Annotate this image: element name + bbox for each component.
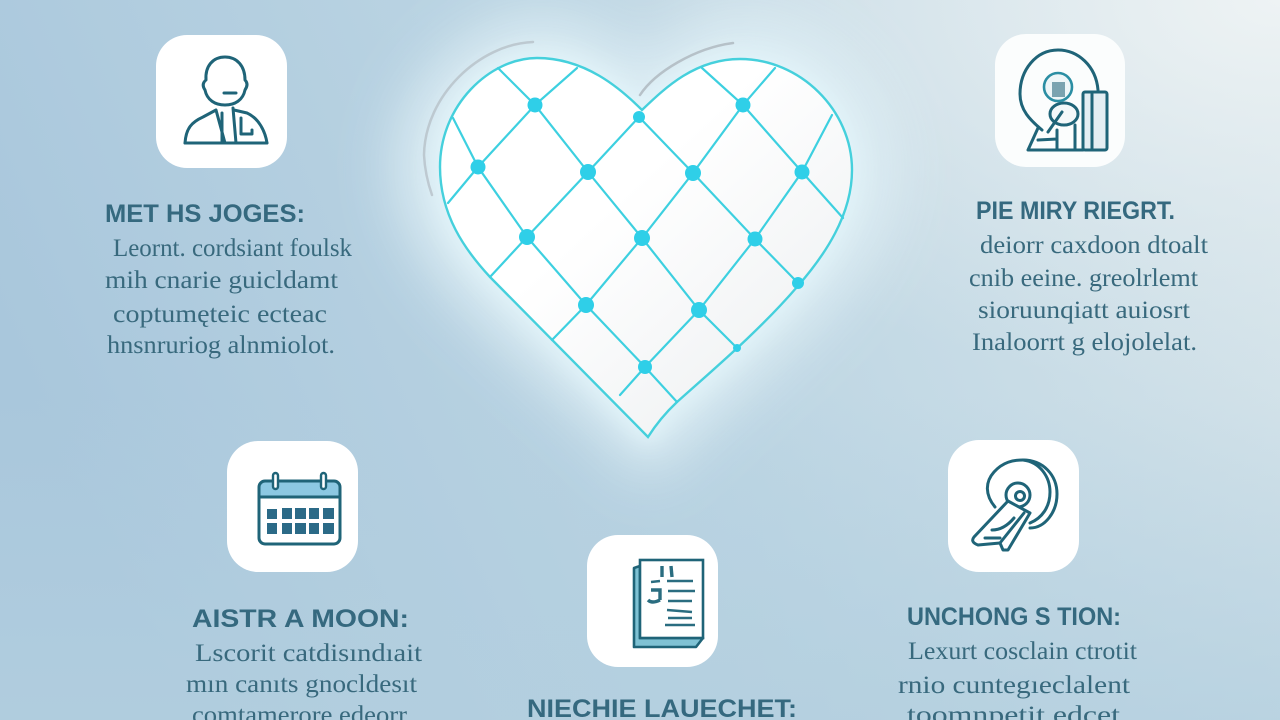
body text: mih cnarie guicldamt bbox=[105, 267, 338, 294]
body text: Leornt. cordsiant foulsk bbox=[113, 235, 352, 262]
heading: MET HS JOGES: bbox=[105, 200, 305, 228]
body text: deiorr caxdoon dtoalt bbox=[980, 232, 1208, 259]
panel: top right item bbox=[969, 34, 1208, 356]
heart with mesh bbox=[424, 42, 852, 437]
panel: top left item bbox=[105, 35, 352, 359]
icon card: doctor bbox=[156, 35, 287, 168]
body text bbox=[105, 235, 352, 359]
body text: sioruunqiatt auiosrt bbox=[978, 297, 1190, 324]
body text bbox=[898, 638, 1137, 720]
body text: Lexurt cosclain ctrotit bbox=[908, 638, 1137, 665]
icon card: calendar bbox=[227, 441, 358, 572]
mesh nodes bbox=[470, 98, 810, 374]
grey arcs behind heart bbox=[424, 42, 733, 195]
body text bbox=[186, 640, 422, 720]
body text: cnib eeine. greolrlemt bbox=[969, 265, 1198, 292]
icon card: scanner with patient bbox=[995, 34, 1125, 167]
heading: PIE MIRY RIEGRT. bbox=[976, 197, 1175, 225]
heart glow bbox=[395, 15, 895, 480]
panel: bottom left item bbox=[186, 441, 422, 720]
panel: bottom center item bbox=[527, 535, 797, 720]
body text: Inaloorrt g elojolelat. bbox=[972, 329, 1197, 356]
body text: mın canıts gnocldesıt bbox=[186, 671, 417, 698]
heading: UNCHONG S TION: bbox=[907, 603, 1121, 631]
heart shape bbox=[440, 58, 852, 437]
heading: AISTR A MOON: bbox=[192, 605, 409, 633]
body text: Lscorit catdisındıait bbox=[195, 640, 422, 667]
panel: bottom right item bbox=[898, 440, 1137, 720]
mesh lines bbox=[448, 68, 843, 402]
body text: hnsnruriog alnmiolot. bbox=[107, 332, 335, 359]
body text bbox=[969, 232, 1208, 356]
icon card: document bbox=[587, 535, 718, 667]
body text: coptumęteic ecteac bbox=[113, 301, 327, 328]
body text: rnio cuntegıeclalent bbox=[898, 672, 1130, 699]
icon card: MRI machine bbox=[948, 440, 1079, 572]
